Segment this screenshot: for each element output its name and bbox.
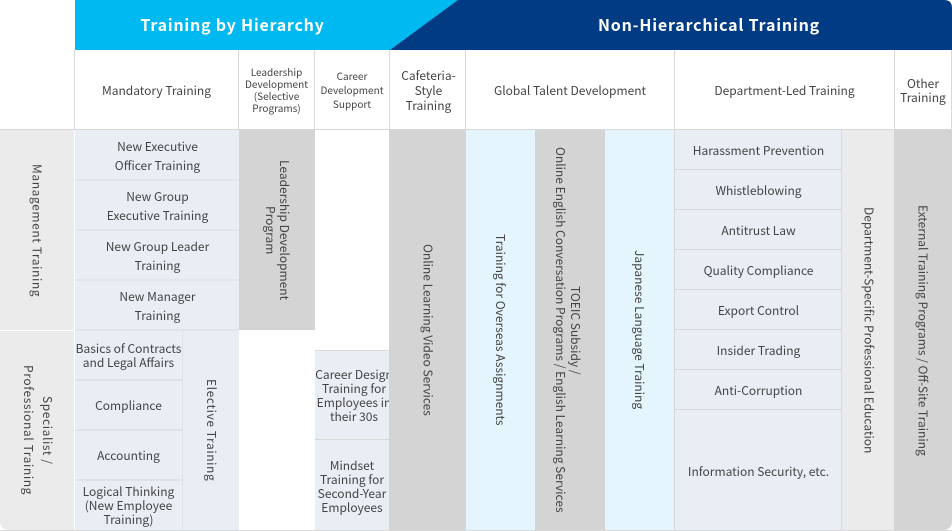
row label: Specialist / Professional Training: Professional Training (20, 365, 37, 496)
cell: Quality Compliance: Quality Compliance (704, 262, 813, 279)
cell: New Manager Training: Training (135, 307, 180, 324)
heading: Training by Hierarchy: Training by Hierarchy (140, 12, 325, 36)
cell: External Training Programs: External Training Programs / Off-Site Training (914, 205, 932, 455)
cell: Elective Training: Elective Training (203, 379, 220, 482)
cell: External Training Programs (894, 130, 952, 530)
heading: Non-Hierarchical Training: Non-Hierarchical Training (598, 12, 820, 36)
cell: New Group Leader Training: Training (135, 257, 180, 274)
cell: Compliance (75, 381, 182, 429)
cell: New Executive Officer Training: New Executive (117, 138, 198, 154)
cell: Accounting (75, 431, 182, 479)
cell: Whistleblowing: Whistleblowing (715, 182, 802, 199)
cell: Export Control (675, 290, 842, 329)
cell: Compliance: Compliance (95, 397, 162, 414)
cell: Department-Specific Professional Education (842, 130, 894, 530)
cell: TOEIC Subsidy / Online English: TOEIC Subsidy / (567, 286, 584, 374)
row label: Specialist / Professional Training (0, 331, 74, 530)
cell: Mindset Training: Mindset (330, 457, 374, 474)
column header: Career Development Support (315, 51, 389, 129)
cell: Leadership Development Program (239, 130, 315, 330)
cell: Quality Compliance (675, 250, 842, 289)
cell: Career Design Training: Training for (322, 380, 386, 397)
cell: Japanese Language Training: Japanese Language Training (631, 250, 648, 410)
cell: New Manager Training (75, 281, 240, 329)
column header: Leadership Development: Development (245, 76, 308, 91)
cell: Mindset Training: Employees (321, 499, 383, 516)
cell: Department-Specific Professional Education: Department-Specific Professional Education (860, 207, 878, 453)
column header: Career Development Support: Career (337, 68, 367, 83)
header band (75, 0, 952, 50)
column header: Leadership Development: (Selective (254, 88, 299, 103)
column header: Cafeteria-Style Training: Style (415, 82, 442, 99)
cell: Accounting: Accounting (97, 447, 160, 464)
column header: Cafeteria-Style Training (391, 50, 466, 129)
cell: Logical Thinking: (New Employee (85, 496, 172, 514)
cell: Insider Trading (675, 330, 842, 369)
column header: Other Training: Other (907, 74, 939, 92)
cell: Harassment Prevention: Harassment Prevention (693, 142, 824, 159)
cell: New Group Leader Training: New Group Leader (106, 238, 209, 255)
column header: Career Development Support: Support (333, 96, 371, 111)
cell: Whistleblowing (675, 170, 842, 209)
cell: Basics of Contracts and Legal Affairs: Basics of Contracts (76, 340, 181, 357)
column header: Other Training: Training (900, 88, 946, 106)
cell: Elective Training (183, 331, 239, 530)
cell: Leadership Development Program: Program (262, 206, 279, 254)
column header: Global Talent Development (466, 50, 674, 129)
cell: Mindset Training (315, 440, 389, 530)
cell: Anti-Corruption (675, 370, 842, 409)
cell: TOEIC Subsidy / Online English (535, 130, 605, 530)
cell: Mindset Training: Second-Year (318, 485, 386, 502)
cell: Career Design Training: their 30s (330, 408, 378, 425)
column header: Leadership Development: Programs) (252, 100, 301, 115)
cell: Insider Trading: Insider Trading (717, 342, 800, 359)
cell: New Manager Training: New Manager (119, 288, 196, 305)
column header: Leadership Development: Leadership (251, 64, 302, 79)
column header: Cafeteria-Style Training: Cafeteria- (401, 67, 456, 84)
row label: Management Training (0, 130, 74, 330)
cell: Information Security: Information Security, etc. (688, 462, 829, 480)
column header: Global Talent Development: Global Talent Development (494, 82, 646, 99)
cell: Training for Overseas Assignments (466, 130, 535, 530)
cell: New Executive Officer Training (75, 130, 240, 179)
column header: Career Development Support: Development (321, 82, 383, 97)
column header: Department-Led Training: Department-Led Training (714, 82, 855, 99)
cell: Logical Thinking: Logical Thinking (83, 482, 174, 500)
cell: Training for Overseas Assignments: Training for Overseas Assignments (492, 234, 509, 426)
cell: Basics of Contracts and Legal Affairs: and Legal Affairs (83, 354, 174, 371)
cell: Japanese Language Training (605, 130, 674, 530)
cell: Export Control: Export Control (718, 302, 799, 319)
cell: Antitrust Law: Antitrust Law (721, 222, 796, 239)
row label: Management Training: Management Training (28, 164, 46, 298)
cell: Online Learning Video Services: Online Learning Video Services (420, 244, 436, 416)
column header: Other Training (895, 50, 951, 129)
cell: New Group Executive Training: Executive Training (107, 207, 208, 224)
column header: Mandatory Training: Mandatory Training (102, 82, 211, 99)
row label: Specialist / Professional Training: Specialist / (39, 396, 56, 465)
cell: Logical Thinking: Training) (104, 510, 153, 528)
cell: Harassment Prevention (675, 130, 842, 169)
cell: Logical Thinking (75, 481, 182, 530)
column header: Department-Led Training (675, 50, 894, 129)
column header: Leadership Development (239, 51, 314, 129)
cell: Antitrust Law (675, 210, 842, 249)
cell: Career Design Training (315, 351, 389, 439)
cell: Mindset Training: Training for (320, 471, 384, 488)
cell: Anti-Corruption: Anti-Corruption (715, 382, 802, 399)
cell: New Group Executive Training (75, 181, 240, 229)
column header: Cafeteria-Style Training: Training (406, 97, 451, 114)
cell: New Group Executive Training: New Group (126, 188, 189, 205)
column header: Mandatory Training (75, 50, 238, 129)
cell: New Executive Officer Training: Officer Training (115, 156, 200, 174)
cell: Basics of Contracts and Legal Affairs (75, 331, 182, 379)
cell: Leadership Development Program: Leadership Development (276, 160, 293, 300)
cell: New Group Leader Training (75, 231, 240, 279)
cell: Online Learning Video Services (389, 130, 466, 530)
cell: TOEIC Subsidy / Online English: Online English Conversation Programs / English Learning Services (552, 147, 569, 513)
cell: Information Security (675, 410, 842, 530)
